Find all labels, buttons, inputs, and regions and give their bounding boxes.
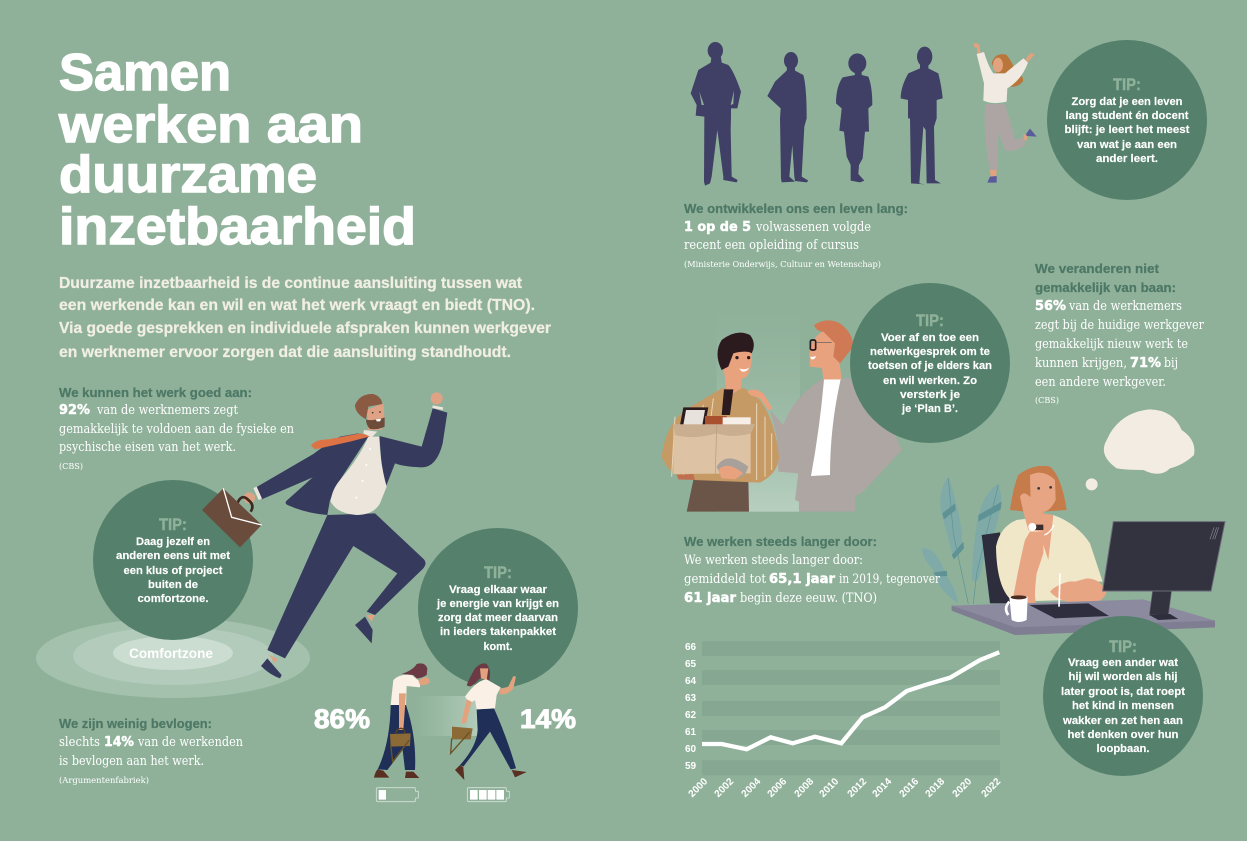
tip circle: energie — [418, 528, 578, 688]
text block: niet gemakkelijk van baan: een andere werkgever. — [1035, 375, 1166, 390]
line chart: pensioenleeftijd: 2022 — [980, 776, 1003, 800]
line chart: pensioenleeftijd: 61 — [685, 727, 697, 738]
tip circle: later groot: het kind in mensen — [1072, 700, 1174, 712]
text block: niet gemakkelijk van baan: (CBS) — [1035, 396, 1059, 405]
tip circle: netwerkgesprek: TIP: — [916, 311, 944, 330]
text block: weinig bevlogen: slechts — [59, 735, 100, 750]
hand on shoulder — [747, 390, 773, 410]
battery low — [376, 788, 418, 802]
tip circle: comfortzone: anderen eens uit met — [116, 550, 230, 562]
tip circle: energie: TIP: — [484, 563, 512, 582]
line chart: pensioenleeftijd: 2008 — [793, 776, 816, 800]
text block: niet gemakkelijk van baan: van de werknemers — [1068, 299, 1182, 314]
line chart: pensioenleeftijd: 2014 — [871, 776, 894, 800]
text block: niet gemakkelijk van baan — [1035, 261, 1205, 405]
title: inzetbaarheid — [59, 198, 416, 256]
percentage 14: 14% — [520, 704, 576, 734]
illustration: briefcase — [202, 488, 262, 547]
tip circle: student en docent — [1047, 40, 1207, 200]
tip circle: comfortzone — [93, 480, 253, 640]
text block: steeds langer door: gemiddeld tot — [684, 572, 767, 587]
line chart: pensioenleeftijd: 66 — [685, 642, 697, 653]
tip circle: student en docent: lang student én docent — [1066, 110, 1189, 122]
illustration: running businessman — [244, 392, 447, 678]
tip circle: student en docent: Zorg dat je een leven — [1072, 96, 1183, 108]
text block: we kunnen het werk goed aan: psychische eisen van het werk. — [59, 440, 236, 455]
tip circle: later groot: het denken over hun — [1068, 729, 1179, 741]
line chart: pensioenleeftijd: 2016 — [898, 776, 921, 800]
text block: leven lang ontwikkelen: We ontwikkelen ons een leven lang: — [684, 201, 908, 216]
tip circle: later groot: hij wil worden als hij — [1068, 671, 1178, 683]
jumping woman — [974, 43, 1037, 183]
intro text: Via goede gesprekken en individuele afspraken kunnen werkgever — [59, 320, 551, 337]
text block: we kunnen het werk goed aan: gemakkelijk te voldoen aan de fysieke en — [59, 422, 295, 437]
comfortzone ellipses: Comfortzone — [129, 645, 213, 661]
tip circle: later groot: TIP: — [1109, 637, 1137, 656]
computer monitor — [1103, 522, 1225, 620]
text block: niet gemakkelijk van baan: gemakkelijk nieuw werk te — [1035, 337, 1188, 352]
thought bubble — [1086, 409, 1194, 490]
tip circle: student en docent: TIP: — [1113, 75, 1141, 94]
intro text: een werkende kan en wil en wat het werk vraagt en biedt (TNO). — [59, 297, 535, 314]
line chart: pensioenleeftijd: 64 — [685, 676, 697, 687]
text block: niet gemakkelijk van baan: kunnen krijgen, — [1035, 356, 1127, 371]
text block: steeds langer door: 61 jaar — [684, 591, 737, 606]
tip circle: student en docent: van wat je aan een — [1077, 139, 1177, 151]
battery full — [467, 788, 509, 802]
text block: we kunnen het werk goed aan — [59, 385, 295, 471]
line chart: pensioenleeftijd: 65 — [685, 659, 697, 670]
silhouette 4 — [901, 47, 943, 184]
title: duurzame — [59, 146, 317, 204]
tip circle: energie: je energie van krijgt en — [436, 598, 559, 610]
text block: steeds langer door: 65,1 jaar — [769, 572, 836, 587]
line chart: pensioenleeftijd: 63 — [685, 693, 697, 704]
text block: steeds langer door — [684, 534, 941, 606]
line chart: pensioenleeftijd: 59 — [685, 761, 697, 772]
tired woman — [374, 663, 430, 778]
silhouette 1 — [691, 42, 741, 186]
tip circle: energie: komt. — [484, 641, 512, 653]
text block: steeds langer door: We werken steeds langer door: — [684, 553, 863, 568]
text block: weinig bevlogen: 14% — [104, 735, 134, 750]
tip circle: netwerkgesprek — [850, 283, 1010, 443]
text block: we kunnen het werk goed aan: van de werknemers zegt — [96, 403, 239, 418]
line chart: pensioenleeftijd: 2020 — [951, 776, 974, 800]
coffee mug — [1006, 595, 1028, 622]
title: werken aan — [58, 96, 363, 154]
tip circle: energie: in ieders takenpakket — [440, 626, 556, 638]
tip circle: comfortzone: comfortzone. — [138, 593, 208, 605]
text block: steeds langer door: in 2019, tegenover — [839, 572, 941, 587]
illustration: woman at desk with thought bubble — [922, 409, 1225, 635]
silhouette 3 — [836, 53, 872, 182]
tip circle: energie: Vraag elkaar waar — [449, 584, 548, 596]
silhouette 2 — [767, 52, 808, 182]
text block: steeds langer door: begin deze eeuw. (TNO) — [740, 591, 877, 606]
intro text: Duurzame inzetbaarheid is de continue aansluiting tussen wat — [59, 275, 522, 292]
line chart: pensioenleeftijd: 2018 — [924, 776, 947, 800]
tip circle: netwerkgesprek: toetsen of je elders kan — [868, 360, 992, 372]
text block: niet gemakkelijk van baan: We veranderen niet — [1035, 261, 1160, 276]
text block: we kunnen het werk goed aan: 92% — [59, 403, 90, 418]
text block: niet gemakkelijk van baan: zegt bij de huidige werkgever — [1035, 318, 1205, 333]
tip circle: comfortzone: buiten de — [148, 579, 198, 591]
text block: we kunnen het werk goed aan: We kunnen het werk goed aan: — [59, 385, 252, 400]
text block: leven lang ontwikkelen: 1 op de 5 — [684, 220, 751, 235]
tip circle: later groot: wakker en zet hen aan — [1062, 715, 1183, 727]
text block: weinig bevlogen: van de werkenden — [137, 735, 244, 750]
tip circle: netwerkgesprek: je ‘Plan B’. — [901, 403, 958, 415]
tip circle: netwerkgesprek: netwerkgesprek om te — [870, 346, 990, 358]
tip circle: netwerkgesprek: versterk je — [900, 389, 960, 401]
energetic woman — [451, 663, 527, 780]
text block: niet gemakkelijk van baan: gemakkelijk van baan: — [1035, 280, 1176, 295]
text block: niet gemakkelijk van baan: 71% — [1130, 356, 1161, 371]
tip circle: later groot: loopbaan. — [1096, 743, 1150, 755]
intro text: en werknemer ervoor zorgen dat die aansluiting standhoudt. — [59, 344, 511, 361]
text block: leven lang ontwikkelen: volwassenen volgde — [755, 220, 871, 235]
text block: leven lang ontwikkelen — [684, 201, 908, 269]
plant — [922, 477, 1002, 604]
illustration: tired and energetic women with batteries — [374, 663, 527, 802]
line chart: pensioenleeftijd: 2000 — [687, 776, 710, 800]
line chart: pensioenleeftijd: 2006 — [766, 776, 789, 800]
title: Samen — [59, 44, 231, 102]
text block: leven lang ontwikkelen: (Ministerie Onderwijs, Cultuur en Wetenschap) — [684, 260, 881, 269]
tip circle: netwerkgesprek: en wil werken. Zo — [883, 375, 977, 387]
tip circle: netwerkgesprek: Voer af en toe een — [881, 332, 979, 344]
intro text — [59, 275, 551, 361]
tip circle: later groot: later groot is, dat roept — [1061, 686, 1185, 698]
line chart: pensioenleeftijd: 62 — [685, 710, 697, 721]
text block: weinig bevlogen: We zijn weinig bevlogen: — [59, 716, 212, 731]
text block: weinig bevlogen: (Argumentenfabriek) — [59, 776, 149, 785]
tip circle: student en docent: blijft: je leert het meest — [1064, 124, 1190, 136]
line chart: pensioenleeftijd: 2004 — [740, 776, 763, 800]
text block: leven lang ontwikkelen: recent een opleiding of cursus — [684, 238, 859, 253]
text block: steeds langer door: We werken steeds langer door: — [684, 534, 877, 549]
title — [58, 44, 416, 256]
text block: niet gemakkelijk van baan: bij — [1164, 356, 1178, 371]
tip circle: energie: zorg dat meer daarvan — [438, 612, 558, 624]
line chart: pensioenleeftijd — [685, 641, 1003, 800]
text block: weinig bevlogen — [59, 716, 244, 785]
text block: weinig bevlogen: is bevlogen aan het werk. — [59, 754, 204, 769]
line chart: pensioenleeftijd: 2002 — [713, 776, 736, 800]
tip circle: later groot — [1043, 616, 1203, 776]
colleague with glasses — [770, 320, 902, 512]
text block: we kunnen het werk goed aan: (CBS) — [59, 462, 83, 471]
line chart: pensioenleeftijd: 2010 — [818, 776, 841, 800]
line chart: pensioenleeftijd: 2012 — [846, 776, 869, 800]
text block: niet gemakkelijk van baan: 56% — [1035, 299, 1066, 314]
tip circle: comfortzone: TIP: — [159, 515, 187, 534]
illustration: silhouettes and jumping woman — [691, 42, 1037, 186]
tip circle: comfortzone: Daag jezelf en — [136, 536, 210, 548]
desk — [952, 599, 1215, 635]
line chart: pensioenleeftijd: 60 — [685, 744, 697, 755]
tip circle: student en docent: ander leert. — [1096, 153, 1158, 165]
illustration: two colleagues with box — [662, 310, 902, 512]
comfortzone ellipses — [36, 618, 310, 698]
colleague with box — [662, 333, 779, 512]
percentage 86: 86% — [314, 704, 370, 734]
tip circle: later groot: Vraag een ander wat — [1068, 657, 1178, 669]
tip circle: comfortzone: een klus of project — [124, 565, 223, 577]
